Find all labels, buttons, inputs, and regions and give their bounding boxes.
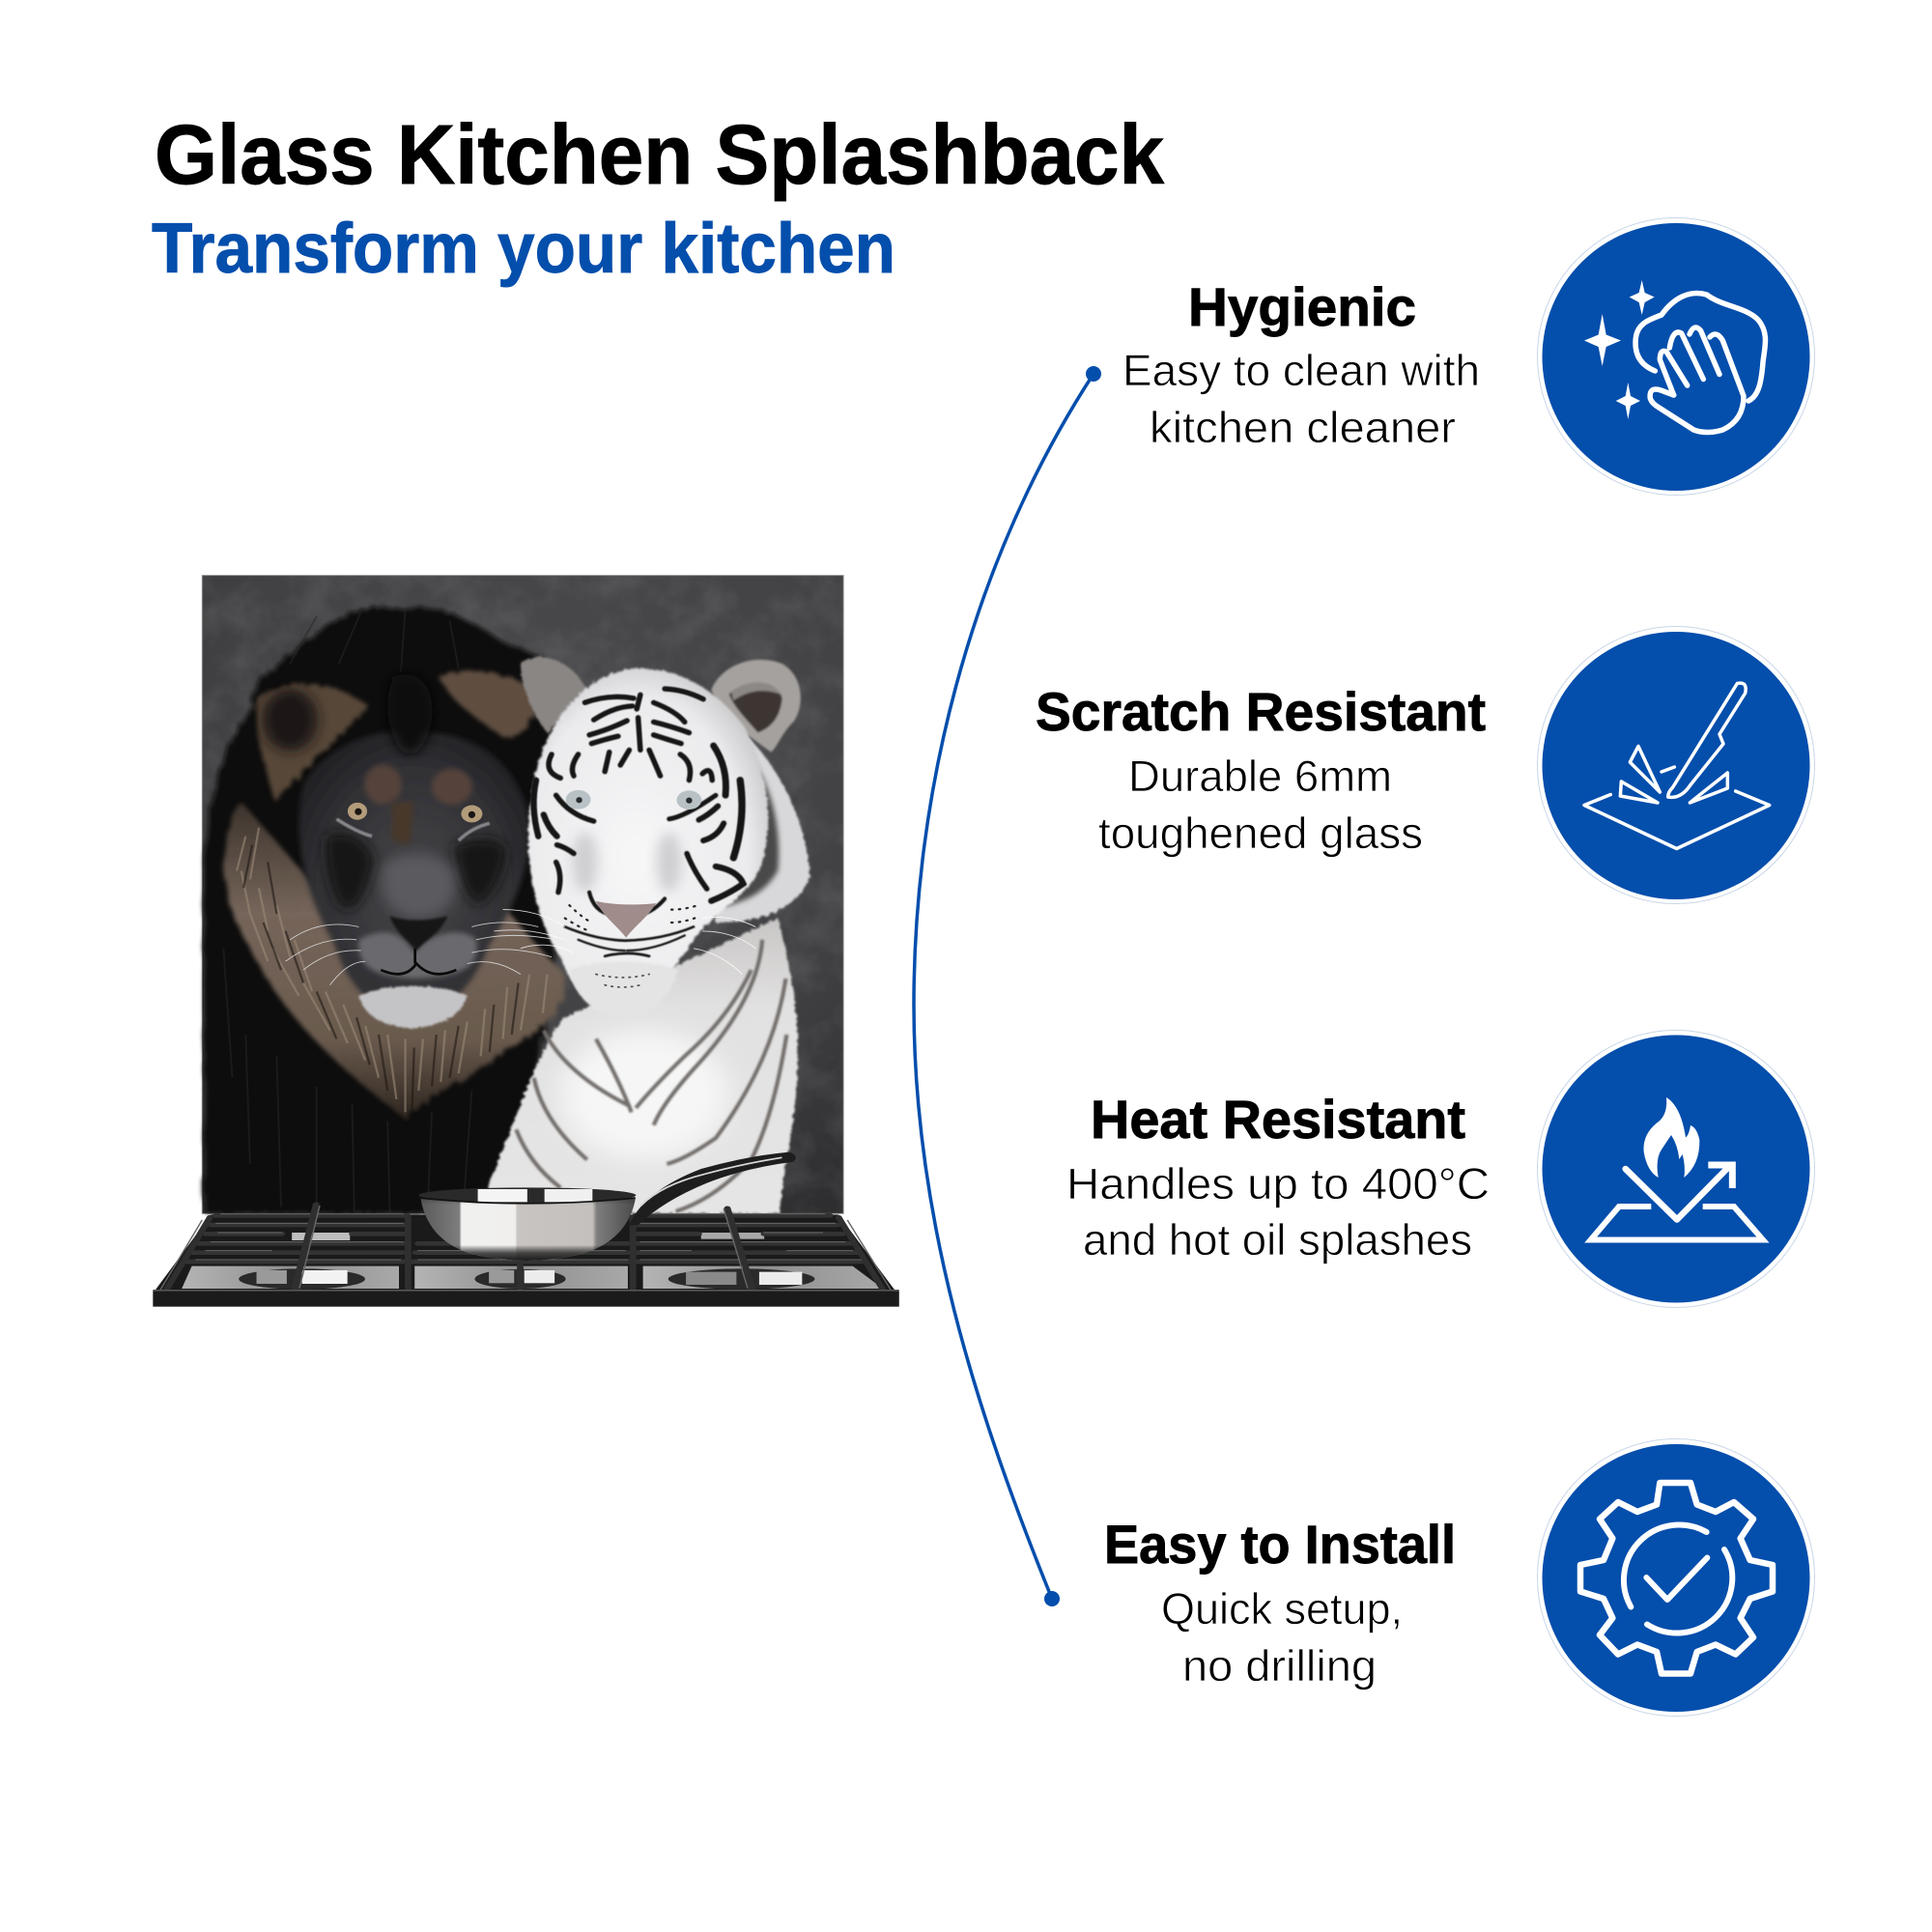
feature text: Hygienic: kitchen cleaner bbox=[1150, 403, 1456, 452]
icon: gear with check mark bbox=[1538, 1439, 1814, 1716]
feature text: Hygienic bbox=[1122, 276, 1480, 452]
product image: splashback panel with lion and white tiger above gas hob bbox=[153, 576, 899, 1307]
tiger muzzle spots bbox=[565, 905, 700, 931]
pan rim bbox=[418, 1187, 636, 1204]
feature text: Easy to Install: Quick setup, bbox=[1161, 1584, 1403, 1634]
pan body bbox=[420, 1199, 636, 1261]
lion whiskers bbox=[286, 923, 556, 985]
feature text: Easy to Install bbox=[1104, 1514, 1456, 1690]
tiger ear bbox=[711, 660, 801, 753]
burners bbox=[239, 1233, 814, 1290]
splashback panel bbox=[202, 576, 843, 1213]
lion mane hair bbox=[237, 828, 547, 1112]
pan handle bbox=[629, 1152, 796, 1225]
feature text: Heat Resistant: Heat Resistant bbox=[1091, 1089, 1465, 1150]
icon: knife scratching glass bbox=[1538, 626, 1814, 904]
gas hob with pan bbox=[153, 1152, 899, 1307]
feature text: Heat Resistant bbox=[1066, 1089, 1490, 1264]
feature text: Heat Resistant: Handles up to 400°C bbox=[1066, 1159, 1490, 1208]
tiger face stripes bbox=[533, 689, 743, 956]
feature text: Scratch Resistant: Scratch Resistant bbox=[1036, 681, 1486, 742]
icon: hand wiping with cloth and sparkles bbox=[1538, 218, 1814, 495]
feature text: Scratch Resistant: Durable 6mm bbox=[1128, 752, 1392, 801]
tiger nose bbox=[596, 901, 656, 938]
icon: flame with heat arrow bbox=[1538, 1030, 1814, 1308]
lion bbox=[204, 608, 574, 1213]
white tiger bbox=[488, 657, 810, 1213]
feature text: Easy to Install: Easy to Install bbox=[1104, 1514, 1456, 1575]
subtitle: Transform your kitchen bbox=[152, 210, 895, 288]
connector arc with end dots bbox=[914, 366, 1101, 1606]
feature text: Scratch Resistant: toughened glass bbox=[1098, 809, 1423, 858]
title: Glass Kitchen Splashback bbox=[155, 108, 1165, 202]
feature text: Heat Resistant: and hot oil splashes bbox=[1083, 1215, 1472, 1264]
feature text: Easy to Install: no drilling bbox=[1182, 1641, 1377, 1690]
tiger whiskers bbox=[494, 910, 755, 975]
tiger ruff bbox=[707, 707, 810, 923]
steel panels bbox=[182, 1266, 883, 1289]
tiger eyes bbox=[566, 790, 701, 810]
hob surface bbox=[155, 1214, 895, 1292]
feature text: Scratch Resistant bbox=[1036, 681, 1486, 858]
tiger body stripes bbox=[516, 940, 786, 1211]
grates bbox=[160, 1205, 891, 1290]
feature text: Hygienic: Easy to clean with bbox=[1122, 346, 1480, 395]
lion body hair bbox=[223, 610, 471, 1211]
hob front edge bbox=[153, 1291, 899, 1307]
lion eyes bbox=[336, 803, 490, 840]
feature text: Hygienic: Hygienic bbox=[1188, 276, 1416, 337]
